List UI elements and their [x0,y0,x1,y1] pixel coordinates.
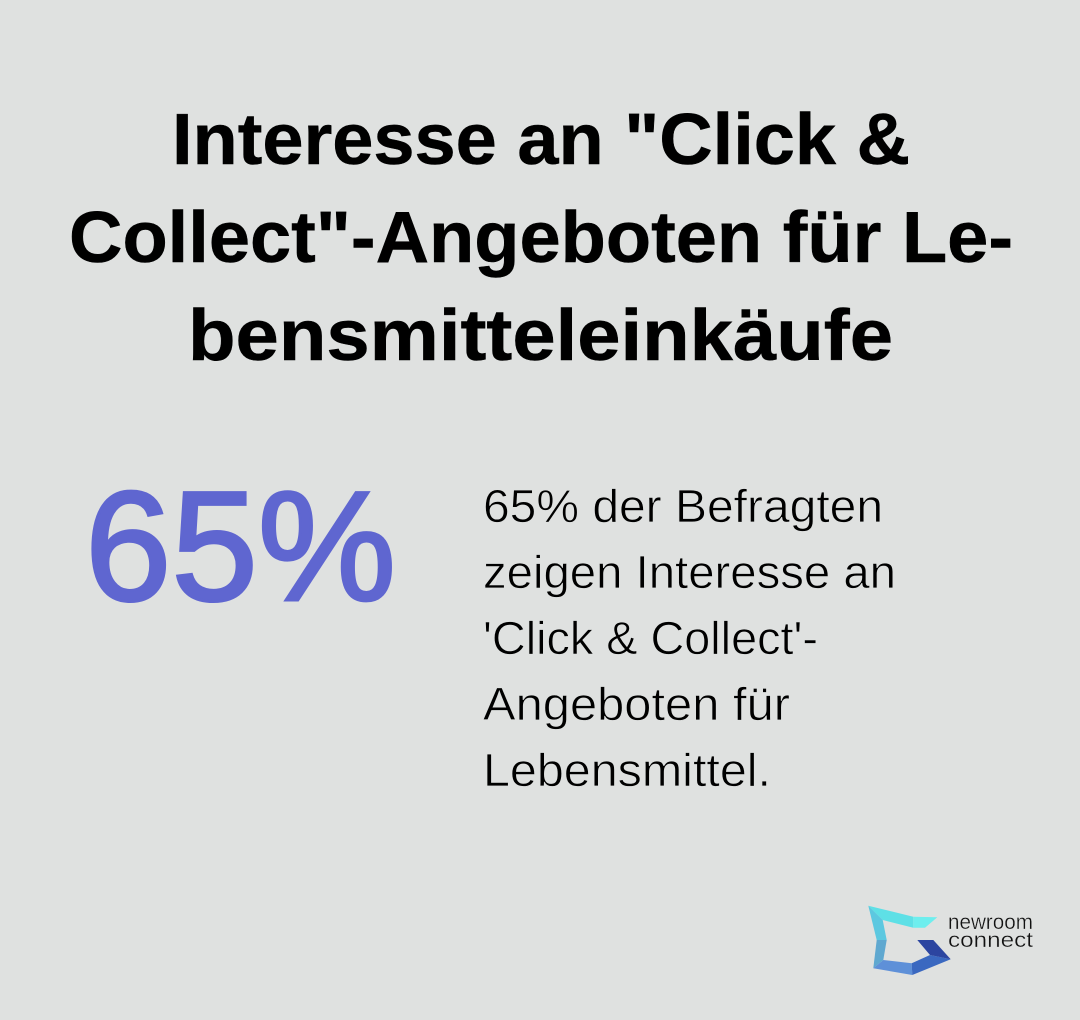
title: Interesse an "Click & [172,100,910,180]
description text [483,480,896,796]
description text: Lebensmittel. [483,744,771,796]
description text: 'Click & Collect'- [483,612,818,664]
big stat: 65%: 65% [85,460,396,634]
title [69,100,1013,376]
icon: logo mark [868,906,951,975]
description text: Angeboten für [483,678,790,730]
logo wordmark [948,911,1033,952]
logo: newroom connect [868,906,1033,975]
logo wordmark: newroom [948,911,1033,934]
title: Collect"-Angeboten für Le- [69,198,1013,278]
logo wordmark: connect [948,929,1033,952]
description text: zeigen Interesse an [483,546,896,598]
title: bensmitteleinkäufe [188,296,893,376]
description text: 65% der Befragten [483,480,883,532]
